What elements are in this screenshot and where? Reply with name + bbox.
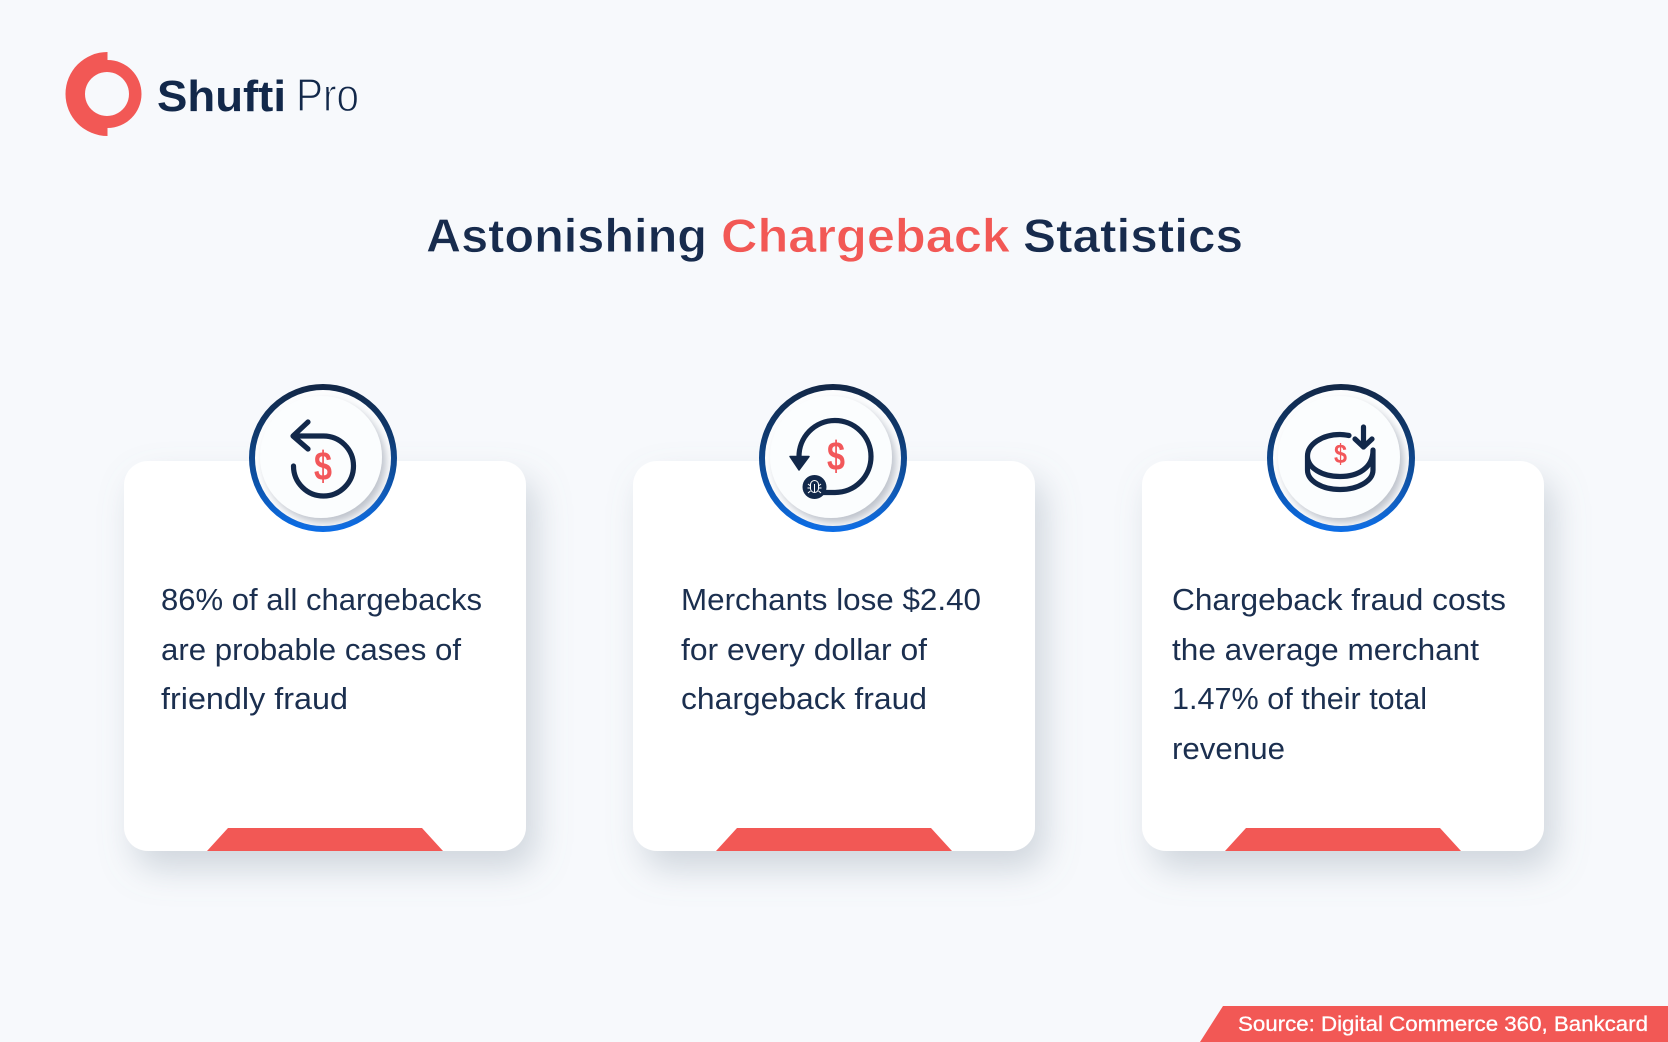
card text: 86% of all chargebacks (161, 582, 482, 617)
icon badge: chargeback arrow with dollar: $ (314, 443, 332, 489)
logo: Shufti Pro (66, 52, 359, 136)
icon badge: dollar return with bug (762, 387, 904, 529)
red tab (1225, 828, 1461, 851)
logo wordmark (157, 69, 359, 121)
logo wordmark: Shufti (157, 72, 286, 121)
red tab (207, 828, 443, 851)
card text: are probable cases of (161, 632, 461, 667)
icon badge: chargeback arrow with dollar (252, 387, 394, 529)
card text: chargeback fraud (681, 681, 927, 716)
card text (1172, 582, 1506, 766)
card text: the average merchant (1172, 632, 1479, 667)
source banner (1200, 1006, 1668, 1042)
card text: for every dollar of (681, 632, 927, 667)
panel: card 2 (633, 387, 1035, 851)
icon badge: coin with down arrow: $ (1334, 439, 1347, 469)
card text: friendly fraud (161, 681, 348, 716)
title: Statistics (1023, 209, 1243, 262)
source banner: Source: Digital Commerce 360, Bankcard (1238, 1013, 1648, 1036)
card text: Chargeback fraud costs (1172, 582, 1506, 617)
card background (1142, 461, 1544, 851)
title: Astonishing (426, 209, 707, 262)
logo wordmark: Pro (296, 69, 359, 121)
card background (633, 461, 1035, 851)
panel: card 1 (124, 387, 526, 851)
title (426, 209, 1243, 262)
logo mark (66, 52, 142, 136)
panel: card 3 (1142, 387, 1544, 851)
card text: 1.47% of their total (1172, 681, 1427, 716)
card background (124, 461, 526, 851)
red tab (716, 828, 952, 851)
card text (681, 582, 981, 716)
icon badge: dollar return with bug: $ (827, 433, 845, 479)
icon badge: coin with down arrow (1270, 387, 1412, 529)
title: Chargeback (721, 209, 1011, 262)
card text: revenue (1172, 731, 1285, 766)
card text: Merchants lose $2.40 (681, 582, 981, 617)
card text (161, 582, 482, 716)
